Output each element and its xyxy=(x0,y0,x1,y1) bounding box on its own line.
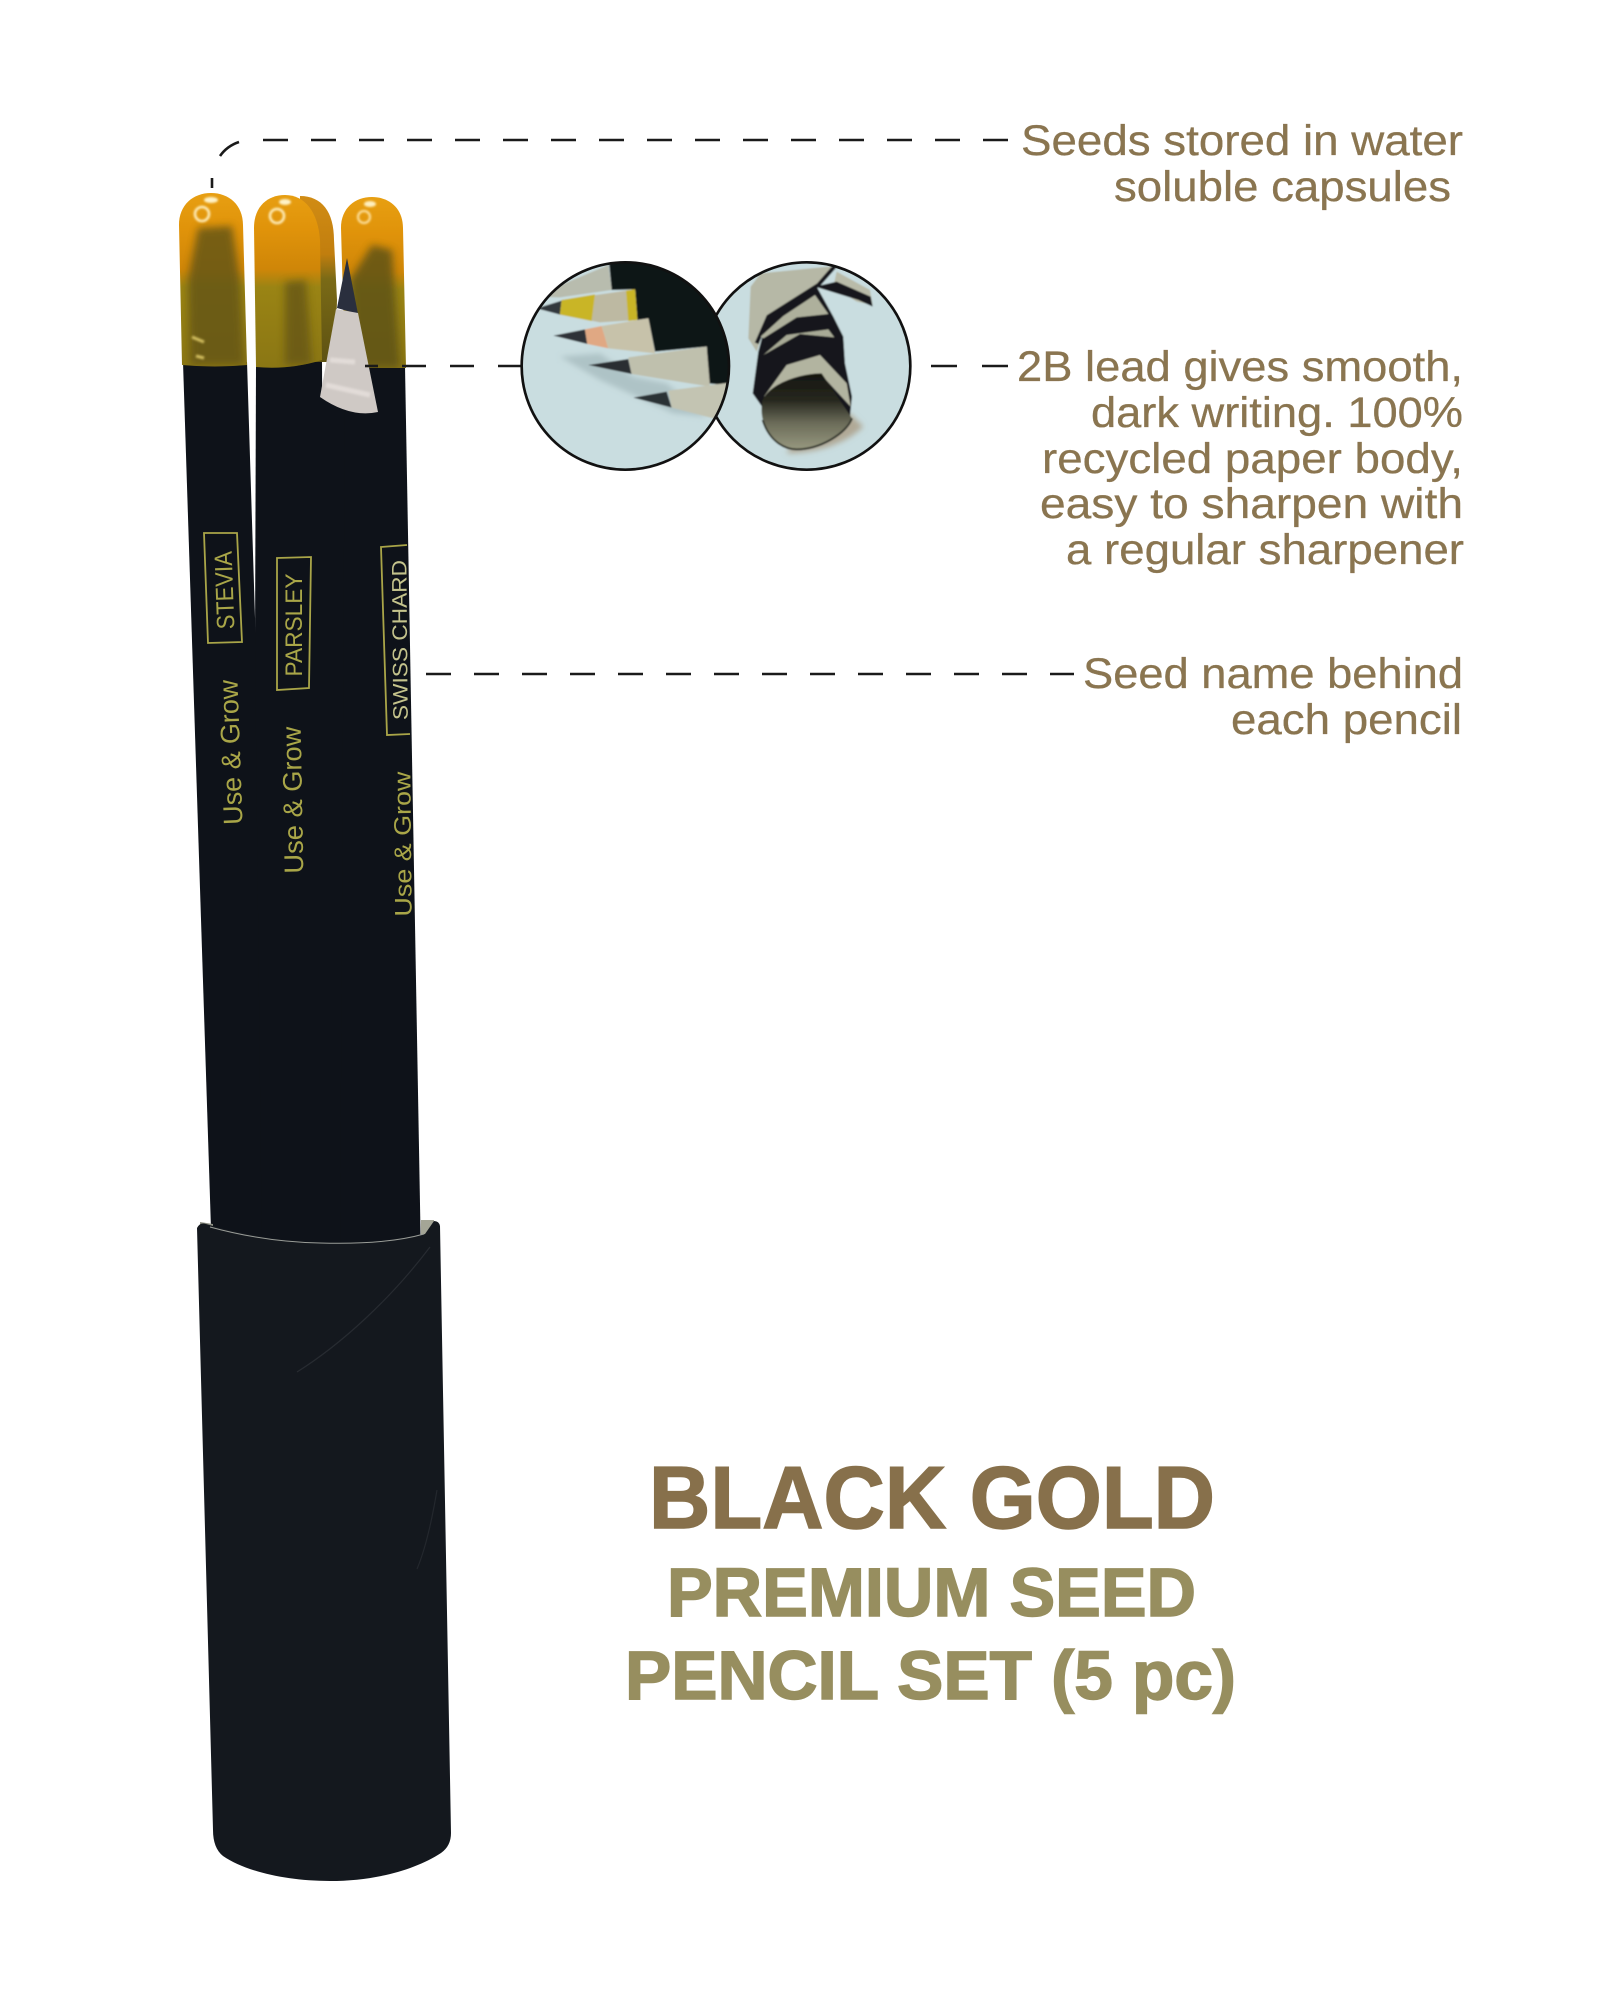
callout text: lead and body: dark writing. 100% xyxy=(1091,389,1463,437)
title: Black Gold: BLACK GOLD xyxy=(649,1448,1215,1547)
leader line: seed name xyxy=(426,673,1074,675)
gold capsule: pencil two xyxy=(254,195,322,368)
brand text: Use & Grow, pencil one: Use & Grow xyxy=(213,679,249,825)
gold capsule: pencil four xyxy=(338,195,408,370)
black tube holder xyxy=(197,1220,451,1881)
callout text: lead and body xyxy=(1017,343,1464,574)
callout text: seed name xyxy=(1083,650,1463,744)
label: Swiss Chard xyxy=(381,545,413,735)
callout text: lead and body: easy to sharpen with xyxy=(1040,480,1463,528)
sharpened pencil tip xyxy=(320,258,378,413)
leader line: seeds capsule xyxy=(212,140,1008,188)
brand text: Use & Grow, pencil four: Use & Grow xyxy=(389,771,418,917)
pencil set product photo xyxy=(175,190,451,1881)
detail circle: sharpened pencil tips xyxy=(520,257,740,473)
label: Swiss Chard: SWISS CHARD xyxy=(388,560,413,720)
label: Stevia: STEVIA xyxy=(210,551,240,630)
label: Parsley: PARSLEY xyxy=(281,574,308,676)
gold capsule: pencil one xyxy=(179,193,247,366)
subtitle: premium seed pencil set: PREMIUM SEED xyxy=(667,1554,1196,1631)
subtitle: premium seed pencil set xyxy=(625,1554,1236,1714)
callout text: seeds capsule: soluble capsules xyxy=(1114,163,1451,211)
label: Stevia xyxy=(204,533,242,643)
callout text: seed name: each pencil xyxy=(1231,696,1462,744)
callout text: lead and body: 2B lead gives smooth, xyxy=(1017,343,1463,391)
gold capsule behind xyxy=(300,196,337,362)
callout text: lead and body: recycled paper body, xyxy=(1042,435,1463,483)
callout text: seeds capsule: Seeds stored in water xyxy=(1021,117,1463,165)
detail circle: rolled paper body xyxy=(716,261,912,471)
pencil bodies xyxy=(183,360,421,1260)
callout text: seeds capsule xyxy=(1021,117,1463,211)
label: Parsley xyxy=(277,557,311,690)
subtitle: premium seed pencil set: PENCIL SET (5 pc) xyxy=(625,1637,1236,1714)
callout text: lead and body: a regular sharpener xyxy=(1066,526,1464,574)
leader line: lead and body xyxy=(365,365,1008,367)
callout text: seed name: Seed name behind xyxy=(1083,650,1463,698)
brand text: Use & Grow, pencil two: Use & Grow xyxy=(277,726,309,874)
